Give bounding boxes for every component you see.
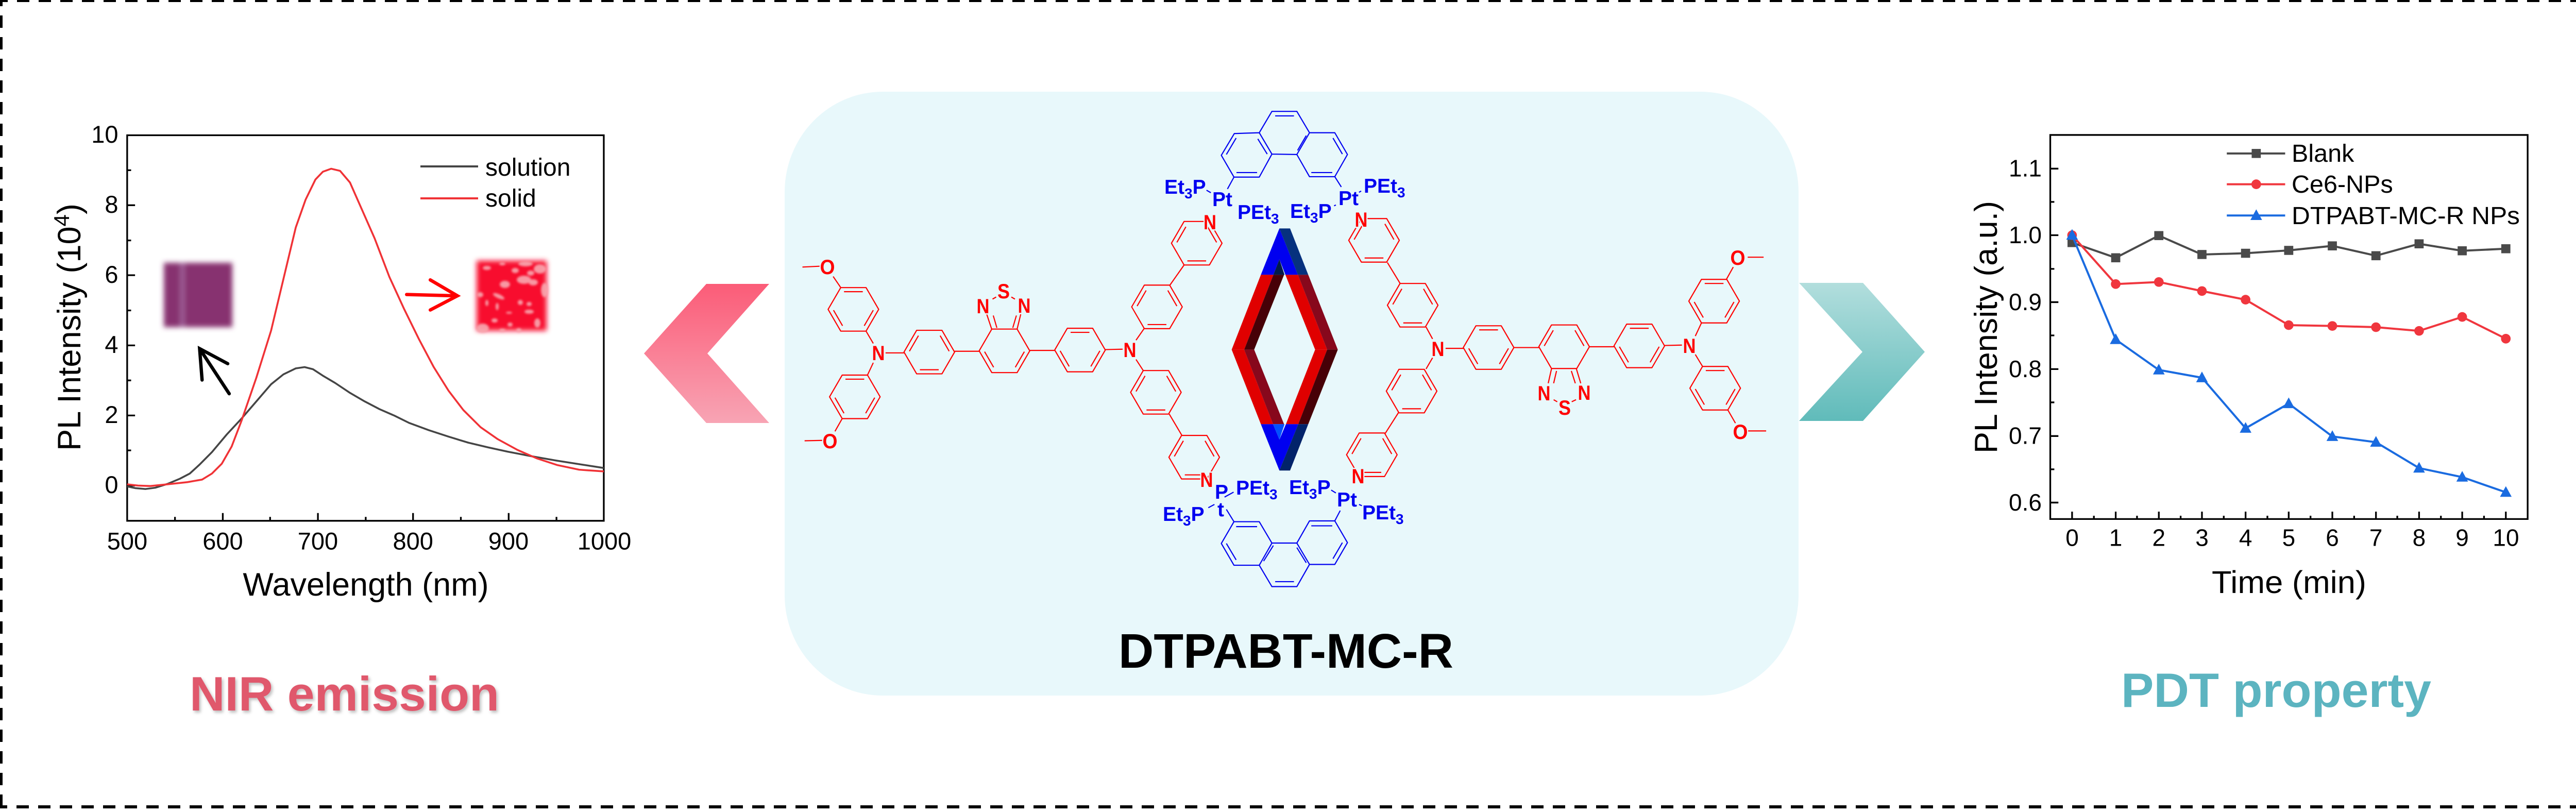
- y axis title: 4: [49, 214, 74, 226]
- y axis numbers: 0.7: [2009, 422, 2042, 449]
- atom labels: red: N: [1018, 295, 1030, 317]
- series: Blank: [2067, 231, 2511, 262]
- x axis numbers: 5: [2282, 525, 2295, 551]
- panel: PL spectrum chart, NIR emission: [49, 121, 631, 721]
- atom labels: blue platinum groups: P: [1191, 503, 1205, 526]
- photo: solution sample: [164, 263, 232, 327]
- x axis numbers: [2065, 525, 2519, 551]
- y axis numbers: [2009, 155, 2042, 516]
- x axis numbers: 9: [2455, 525, 2469, 551]
- y axis numbers: 10: [91, 121, 118, 148]
- atom labels: blue platinum groups: 3: [1183, 513, 1191, 529]
- photo: solid sample: [477, 261, 548, 333]
- y axis numbers: 2: [105, 401, 118, 428]
- atom labels: red: S: [1558, 397, 1571, 419]
- arrow: red to solid sample: [406, 280, 457, 310]
- heading: NIR emission: NIR emission: [190, 667, 499, 721]
- atom labels: blue platinum groups: 3: [1396, 511, 1404, 527]
- y axis numbers: 1.0: [2009, 222, 2042, 248]
- legend: solution: [485, 154, 570, 181]
- legend: DTPABT-MC-R NPs: [2292, 202, 2520, 230]
- series: Ce6-NPs: [2067, 230, 2511, 344]
- atom labels: red: N: [1352, 465, 1364, 488]
- panel: molecule DTPABT-MC-R: [785, 92, 1799, 696]
- x axis numbers: 1: [2109, 525, 2122, 551]
- atom labels: red: [820, 209, 1748, 492]
- atom labels: blue platinum groups: P: [1317, 477, 1331, 499]
- x axis title: Time (min): [2212, 565, 2366, 600]
- x axis numbers: 900: [488, 528, 529, 554]
- x axis title: Wavelength (nm): [243, 567, 489, 603]
- phenanthrene linkers: [1207, 111, 1362, 587]
- x axis numbers: [107, 528, 631, 554]
- x axis numbers: 1000: [578, 528, 631, 554]
- atom labels: blue platinum groups: P: [1318, 200, 1332, 223]
- x axis numbers: 600: [202, 528, 243, 554]
- y axis title: PL Intensity (a.u.): [1968, 201, 2004, 453]
- atom labels: blue platinum groups: PEt: [1364, 175, 1397, 197]
- atom labels: red: N: [1578, 382, 1591, 404]
- y axis title: ): [52, 204, 88, 214]
- arrow: teal chevron: [1799, 283, 1925, 421]
- atom labels: blue platinum groups: P: [1215, 481, 1228, 503]
- arrow: black to solution sample: [199, 349, 229, 394]
- legend: [2227, 140, 2520, 230]
- atom labels: red: N: [1683, 335, 1696, 358]
- atom labels: blue platinum groups: Pt: [1212, 189, 1232, 211]
- x axis numbers: 500: [107, 528, 147, 554]
- x axis numbers: 3: [2195, 525, 2209, 551]
- molecule right arm bonds and rings: [1347, 218, 1766, 477]
- atom labels: blue platinum groups: Pt: [1337, 489, 1357, 511]
- legend: Ce6-NPs: [2292, 171, 2393, 198]
- atom labels: blue platinum groups: 3: [1184, 185, 1193, 201]
- x axis numbers: 4: [2239, 525, 2252, 551]
- atom labels: red: O: [822, 430, 838, 453]
- atom labels: red: N: [872, 342, 885, 365]
- y axis numbers: 4: [105, 331, 118, 358]
- atom labels: red: N: [1355, 209, 1367, 231]
- curve: solution: [127, 367, 604, 489]
- atom labels: blue platinum groups: 3: [1397, 184, 1405, 200]
- PDT axes and frame: [2050, 135, 2528, 519]
- atom labels: red: S: [997, 280, 1010, 303]
- x axis numbers: 8: [2413, 525, 2426, 551]
- y axis numbers: [91, 121, 118, 498]
- arrow: pink chevron: [644, 284, 769, 423]
- heading: PDT property: PDT property: [2121, 663, 2431, 717]
- atom labels: blue platinum groups: Et: [1290, 200, 1310, 223]
- y axis numbers: 8: [105, 191, 118, 218]
- y axis numbers: 6: [105, 261, 118, 288]
- atom labels: blue platinum groups: [1163, 175, 1405, 529]
- x axis numbers: 6: [2326, 525, 2339, 551]
- molecule left arm bonds and rings: [803, 222, 1222, 479]
- atom labels: red: O: [1730, 247, 1745, 269]
- x axis numbers: 700: [298, 528, 338, 554]
- atom labels: red: N: [1200, 469, 1213, 492]
- atom labels: red: N: [977, 295, 989, 318]
- atom labels: blue platinum groups: PEt: [1236, 477, 1269, 499]
- atom labels: blue platinum groups: 3: [1271, 211, 1279, 227]
- legend: Blank: [2292, 140, 2354, 167]
- panel background: [785, 92, 1799, 696]
- atom labels: blue platinum groups: 3: [1310, 210, 1318, 226]
- PL spectrum axes and frame: [127, 135, 604, 521]
- atom labels: blue platinum groups: t: [1217, 499, 1224, 521]
- atom labels: blue platinum groups: Et: [1289, 477, 1309, 499]
- y axis numbers: 0.8: [2009, 356, 2042, 382]
- series: DTPABT-MC-R NPs: [2066, 229, 2512, 497]
- atom labels: red: N: [1431, 338, 1445, 361]
- molecule name: DTPABT-MC-R: [1118, 624, 1453, 679]
- y axis numbers: 0.9: [2009, 289, 2042, 315]
- legend: [420, 154, 570, 212]
- y axis numbers: 0.6: [2009, 489, 2042, 516]
- atom labels: blue platinum groups: 3: [1309, 486, 1317, 502]
- curve: solid: [127, 168, 604, 486]
- x axis numbers: 0: [2065, 525, 2079, 551]
- atom labels: blue platinum groups: 3: [1269, 486, 1278, 502]
- y axis title: PL Intensity (10: [52, 226, 88, 451]
- x axis numbers: 7: [2369, 525, 2382, 551]
- atom labels: blue platinum groups: Et: [1164, 176, 1184, 198]
- 3D rhombus core: [1232, 228, 1338, 470]
- panel: PDT line chart: [1968, 135, 2528, 717]
- atom labels: red: N: [1123, 339, 1137, 362]
- atom labels: blue platinum groups: PEt: [1362, 502, 1396, 524]
- legend: solid: [485, 185, 536, 212]
- atom labels: red: N: [1204, 211, 1216, 234]
- x axis numbers: 800: [393, 528, 433, 554]
- atom labels: blue platinum groups: P: [1193, 176, 1206, 198]
- atom labels: blue platinum groups: PEt: [1238, 201, 1271, 224]
- atom labels: red: O: [820, 256, 835, 279]
- y axis numbers: 0: [105, 471, 118, 498]
- x axis numbers: 2: [2153, 525, 2165, 551]
- atom labels: blue platinum groups: Pt: [1338, 188, 1359, 210]
- atom labels: blue platinum groups: Et: [1163, 503, 1183, 526]
- atom labels: red: N: [1537, 382, 1551, 405]
- y axis numbers: 1.1: [2009, 155, 2042, 181]
- atom labels: red: O: [1733, 421, 1748, 444]
- x axis numbers: 10: [2493, 525, 2519, 551]
